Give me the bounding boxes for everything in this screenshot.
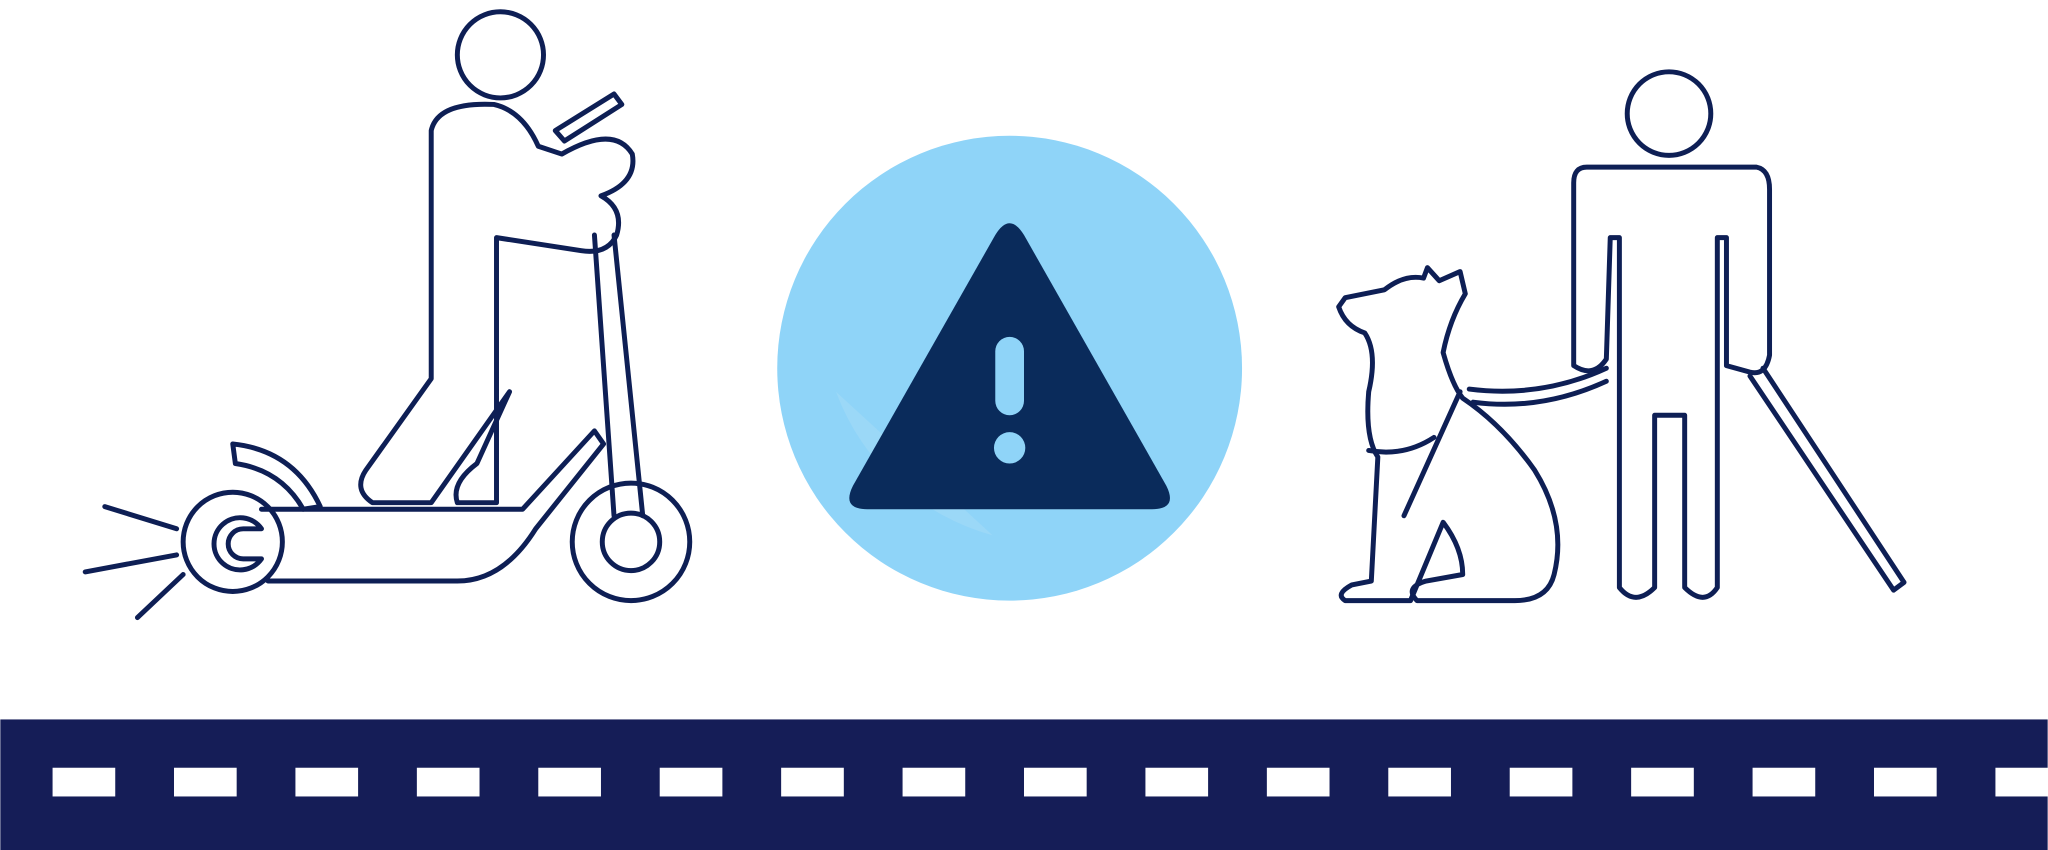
icon: scooter rider looking at phone bbox=[85, 12, 690, 618]
person head bbox=[1627, 72, 1711, 155]
front wheel bbox=[572, 483, 690, 601]
exclamation mark bbox=[995, 337, 1024, 415]
cane bbox=[1750, 368, 1904, 590]
rider body bbox=[361, 104, 633, 503]
deck bbox=[261, 431, 604, 581]
scooter stem bbox=[594, 235, 643, 516]
rider head bbox=[457, 12, 544, 98]
lane dashes bbox=[53, 768, 2048, 796]
phone bbox=[555, 94, 622, 141]
road bbox=[0, 719, 2048, 850]
light rays bbox=[85, 507, 183, 618]
warning circle bbox=[777, 136, 1242, 601]
dog bbox=[1339, 268, 1558, 601]
icon: warning triangle bbox=[849, 223, 1170, 509]
person body bbox=[1574, 167, 1770, 597]
rear fender bbox=[233, 444, 320, 509]
rear wheel bbox=[183, 492, 282, 591]
icon: blind person with guide dog and cane bbox=[1339, 72, 1904, 601]
harness handle bbox=[1469, 368, 1606, 404]
